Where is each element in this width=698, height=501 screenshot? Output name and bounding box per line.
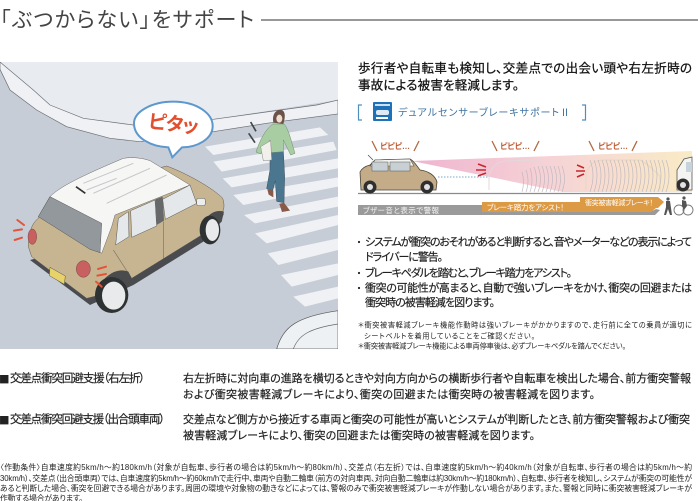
car side view xyxy=(360,155,437,194)
sidewalk corner lower right xyxy=(277,311,338,349)
sweater xyxy=(256,124,295,155)
ghost car outline 2 xyxy=(586,160,660,190)
antenna xyxy=(76,187,85,193)
body xyxy=(183,412,690,442)
sensor cone xyxy=(412,151,692,192)
illustration: car stopping before pedestrian at crosswalk xyxy=(0,62,338,349)
speech bubble: ピタッ xyxy=(147,111,200,139)
car shadow xyxy=(30,214,224,305)
body xyxy=(183,371,691,401)
section: intersection right/left turn xyxy=(0,371,691,401)
sidewalk upper xyxy=(0,62,338,125)
section: intersection crossing vehicles xyxy=(0,412,690,442)
body: 交差点など側方から接近する車両と衝突の可能性が高いとシステムが判断したとき、前方衝突警報および衝突 xyxy=(183,412,690,426)
system name header xyxy=(358,102,586,121)
footnotes on brake: ＊衝突被害軽減ブレーキ機能による車両停車後は、必ずブレーキペダルを踏んでください。 xyxy=(358,342,626,350)
dotted sensing beam xyxy=(438,176,488,178)
system name: デュアルセンサーブレーキサポートⅡ xyxy=(398,106,570,119)
intro text xyxy=(358,60,692,92)
speech bubble xyxy=(134,102,213,157)
pedestrian xyxy=(249,110,295,212)
wheels xyxy=(95,277,128,313)
bracket right xyxy=(582,105,586,120)
shoes xyxy=(267,189,290,212)
bullet list: 衝突の可能性が高まると、自動で強いブレーキをかけ、衝突の回避または xyxy=(365,280,692,294)
bullet list xyxy=(358,234,692,309)
bullet list: ドライバーに警告。 xyxy=(365,250,443,264)
brake light marks xyxy=(14,220,106,287)
icon: pedestrian and cyclist xyxy=(664,196,693,215)
warning marks xyxy=(476,164,585,177)
ghost car outline 1 xyxy=(489,160,562,190)
taillights xyxy=(28,229,37,244)
orange brake assist bar: ブレーキ踏力をアシスト！ xyxy=(487,202,564,212)
rear window xyxy=(38,197,102,253)
operating conditions note xyxy=(0,462,692,501)
side windows xyxy=(116,212,129,245)
body: および衝突被害軽減ブレーキにより、衝突の回避または衝突時の被害軽減を図ります。 xyxy=(183,387,595,401)
car xyxy=(14,158,224,313)
operating conditions note: 30km/h）、交差点（出合頭車両）では、自車速度約5km/h～約60km/hで走行中、車両や自動二輪車（前方の対向車両、対向自動二輪車は約30km/h～約180km/h）、自転車、歩行者を検知し、システムが衝突の可能性が xyxy=(0,473,692,483)
bullet list: システムが衝突のおそれがあると判断すると、音やメーターなどの表示によって xyxy=(365,234,692,248)
operating conditions note: あると判断した場合、衝突を回避できる場合があります。周囲の環境や対象物の動きなどによっては、警報のみで衝突被害軽減ブレーキが作動しない場合があります。また、警報と同時に衝突被害軽減ブレーキが xyxy=(0,483,692,493)
intro text: 歩行者や自転車も検知し、交差点での出会い頭や右左折時の xyxy=(358,60,692,76)
body: 右左折時に対向車の進路を横切るときや対向方向からの横断歩行者や自転車を検出した場合、前方衝突警報 xyxy=(183,371,691,385)
oncoming vehicle xyxy=(676,157,692,192)
mirror xyxy=(197,198,205,206)
legs xyxy=(267,151,285,203)
road surface xyxy=(0,62,338,349)
heading xyxy=(0,371,145,387)
orange automatic brake bar: 衝突被害軽減ブレーキ！ xyxy=(585,198,653,207)
icon: brake support badge xyxy=(373,102,392,121)
roof xyxy=(38,158,190,253)
wheel arch xyxy=(104,270,132,282)
heading: 交差点衝突回避支援（右左折） xyxy=(10,371,145,385)
heading: 交差点衝突回避支援（出合頭車両） xyxy=(10,412,165,426)
gray warning bar: ブザー音と表示で警報 xyxy=(363,205,440,215)
licence plate xyxy=(49,267,65,284)
sound wave arcs xyxy=(522,160,669,192)
orange automatic brake bar xyxy=(580,197,664,208)
diagram: sensing and braking stages xyxy=(358,141,693,215)
beep label 3 xyxy=(589,141,637,151)
footnotes on brake: ＊衝突被害軽減ブレーキ機能作動時は強いブレーキがかかりますので、走行前に全ての乗員が適切に xyxy=(358,320,692,330)
bullet list: 衝突時の被害軽減を図ります。 xyxy=(365,295,495,309)
crosswalk stripes xyxy=(205,127,338,307)
motion marks xyxy=(249,122,256,143)
car body xyxy=(28,166,224,298)
beep label 1 xyxy=(372,141,419,151)
operating conditions note: 〈作動条件〉自車速度約5km/h～約180km/h（対象が自転車、歩行者の場合は約5km/h～約80km/h）、交差点（右左折）では、自車速度約5km/h～約40km/h（対象が自転車、歩行者の場合は約5km/h～約 xyxy=(0,462,692,472)
bullet list: ブレーキペダルを踏むと、ブレーキ踏力をアシスト。 xyxy=(365,266,572,280)
beep label 2: ピピピ… xyxy=(500,142,530,151)
ground line xyxy=(358,192,692,194)
hair and face xyxy=(273,110,285,124)
curb band xyxy=(0,62,338,142)
orange brake assist bar xyxy=(482,202,656,212)
tote bag xyxy=(261,141,272,161)
beep label 1: ピピピ… xyxy=(380,142,410,151)
body: 被害軽減ブレーキにより、衝突の回避または衝突時の被害軽減を図ります。 xyxy=(183,428,535,442)
title: 「ぶつからない」をサポート xyxy=(0,9,254,32)
footnotes on brake: シートベルトを着用していることをご確認ください。 xyxy=(364,332,535,340)
door lines xyxy=(113,222,163,278)
gray warning bar xyxy=(358,205,660,215)
beep label 3: ピピピ… xyxy=(598,142,628,151)
beep label 2 xyxy=(492,141,539,151)
footnotes on brake xyxy=(358,320,692,350)
intro text: 事故による被害を軽減します。 xyxy=(358,78,519,92)
bracket left xyxy=(358,105,362,120)
